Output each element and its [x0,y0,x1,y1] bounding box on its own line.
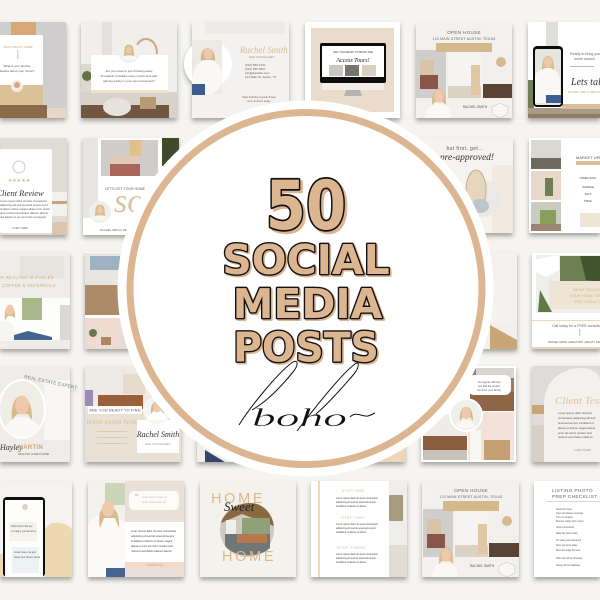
card: listing photo prep checklist: Mow and edge the lawn [556,549,581,552]
card: sold post: RACHEL SMITH | REALTOR [100,228,136,232]
card: client review tablet post: quis nostrud exercitation ullamco laboris [0,211,48,215]
card: real estate expert post: Hayley [0,443,23,452]
card: real estate expert post: REAL ESTATE EXPERT [24,374,78,390]
card: three steps post: STEP TWO [341,515,365,520]
title line: 50: 50 [266,165,346,245]
card: sweet home agent post: Rachel Smith [136,430,179,439]
card: woman quote post [88,481,184,577]
card: client testimonial arch post: nostrud exercitation ullamco [558,435,593,439]
card: pre-approved post: but first, get... [446,146,484,152]
card: sweet home agent post: REAL ESTATE AGENT [145,443,171,446]
title line: posts: POSTS [233,325,379,372]
card: client review tablet post: ★★★★★ [8,178,31,184]
card: home sweet home post: HOME [222,549,276,565]
card: sold post: sold [114,183,172,220]
card: home question post: feature about your home? [0,69,35,73]
card: phone home search post [528,22,600,118]
card: photo collage post [85,252,181,349]
card: three steps post: adipiscing elit sed do eiusmod tempor [336,501,376,504]
card: three steps post: adipiscing elit sed do eiusmod tempor [336,557,376,560]
card: three steps post: incididunt ut labore et dolore [336,505,367,508]
script word: boho [239,361,375,432]
card: open house post [416,23,512,118]
card: agent contact post: Rachel Smith [239,45,288,55]
card: three steps post: Lorem ipsum dolor sit amet consectetur [336,523,378,526]
card: sweet home agent post: home sweet home [87,417,140,426]
card: home value post: FOR TODAY? [574,299,600,304]
card: agent contact post: REAL ESTATE AGENT [249,56,275,59]
card: testimonial under circle [197,366,293,462]
card: bedroom photo post [420,252,517,349]
title line: 50: 50 [266,165,346,245]
card: client testimonial arch post: CLIENT NAME [574,449,591,452]
card: woman quote post: Lorem ipsum dolor sit amet consectetur [131,529,177,533]
title line: social: SOCIAL [222,236,390,284]
card: open house post repeated: RACHEL SMITH [470,564,495,568]
card: phone chat post [0,481,72,577]
card: client testimonial arch post: labore et dolore magna aliqua [558,426,595,430]
card: client review tablet post: ut labore dolore magna aliqua enim minim [0,207,51,211]
title line: posts: POSTS [235,326,380,373]
card: sold post: LET'S GET YOUR HOME [105,187,146,191]
card: woman quote post: incididunt ut labore et dolore magna [131,539,173,543]
card: monitor online tour post: Access Tours! [335,58,370,64]
title line: 50: 50 [268,168,349,248]
card: client testimonial arch post: eiusmod tempor incididunt ut [558,421,594,425]
card: sweet home agent post [85,366,181,462]
card: listing photo prep checklist: Make the beds neatly [556,532,579,535]
card: quote and photo grid post: you find the perfect [478,384,500,388]
card: open house post: 123 MAIN STREET AUSTIN, TEXAS [432,37,496,41]
title line: posts: POSTS [233,325,379,372]
card: home value post: WHAT WOULD [573,287,600,292]
card: listing photo prep checklist: Clear countertops [556,526,575,529]
card: market update post [529,138,600,233]
card: woman quote post: " [135,494,138,501]
card: agent contact post [184,22,289,118]
card: home sweet home post [200,481,296,577]
card: woman quote post: aliqua ut enim ad minim veniam quis [131,544,174,548]
card: home value post [532,253,600,349]
card: client review tablet post: Lorem ipsum dolor sit amet consectetur [0,199,47,203]
card: market update post: PRICE [584,200,592,203]
card: quote and photo grid post: Our agents will help [478,380,501,384]
card: home sweet home post: HOME [211,491,265,507]
card: three steps post [311,481,407,577]
card: open house post: RACHEL SMITH [463,105,488,109]
card: three steps post: STEP ONE [341,488,365,493]
card: agent contact post: let's connect today [247,99,271,103]
title line: social: SOCIAL [222,236,390,284]
card: phone home search post: home search [574,57,595,61]
card: three steps post: STEP THREE [337,545,365,550]
card: open house post repeated: OPEN HOUSE [454,488,488,493]
card: real estate expert post: MARTIN [18,445,43,451]
card: open house post repeated: 123 MAIN STREET AUSTIN, TEXAS [439,495,503,499]
card: listing photo prep checklist: Put away personal items [556,539,582,542]
title line: media: MEDIA [234,282,384,330]
card: sold post [83,138,179,235]
card: home question post: WHAT ABOUT HOME [3,45,33,49]
card: listing photo prep checklist: Remove clutter from rooms [556,520,585,523]
card: agent contact post: info@website.com [245,71,270,75]
card: three steps post: incididunt ut labore et dolore [336,561,367,564]
card: client review tablet post: nisi aliquip ex ea commodo consequat [0,215,46,219]
card: three steps post: Lorem ipsum dolor sit amet consectetur [336,553,378,556]
card: buying a home post: thousands of dollars every month and start [101,74,158,78]
card: listing photo prep checklist: Park cars off the driveway [556,557,583,560]
card: client review tablet post: adipiscing elit sed eiusmod tempor incid [0,203,48,207]
card: listing photo prep checklist: Clean the home [556,508,573,511]
title line: social: SOCIAL [224,238,391,286]
script word: boho: boho [252,404,347,432]
card: agent contact post: Start building a great future [242,95,276,99]
card: home sweet home post: Sweet [224,499,255,514]
card: agent contact post: 123 Main St, Austin, TX [245,75,276,79]
card: quote and photo grid post [421,366,516,462]
card: agent contact post: (512) 555-1234 [245,63,266,67]
title: 50 social media posts [222,165,391,373]
card: open house post: OPEN HOUSE [447,30,481,35]
title line: media: MEDIA [233,280,383,328]
card: market update post: HOMES SOLD [580,177,597,180]
card: home question post [0,22,66,118]
card: real estate expert post: REALTOR | AGENT NAME [18,452,49,456]
card: buying a home post: Are you close to just throwing away [105,69,153,73]
card: woman quote post: adipiscing elit sed do eiusmod tempor [131,534,175,538]
card: home question post: What is your favorite [3,64,31,68]
card: client testimonial arch post [532,366,600,462]
card: three steps post: adipiscing elit sed do eiusmod tempor [336,527,376,530]
card: woman quote post: amet consectetur elit [142,500,166,504]
card: pre-approved post: pre-approved! [439,153,494,163]
card: phone chat post: listed your dream home [14,556,41,559]
card: listing photo prep checklist: Store pet items away [556,544,578,547]
central badge circle [118,100,494,476]
card: listing photo prep checklist: Open all window coverings [556,512,584,515]
card: buying a home post [81,22,177,118]
card: monitor online tour post [305,22,400,118]
card: client testimonial arch post: consectetur adipiscing elit sed [558,416,596,420]
card: market update post: AVERAGE [582,186,594,189]
title line: media: MEDIA [233,280,383,328]
card: market update post: DAYS [585,193,592,196]
card: phone chat post: Great news, we just [14,551,36,554]
card: woman quote post: Lorem ipsum dolor sit [142,495,167,499]
card: client testimonial arch post: enim ad minim veniam quis [558,431,592,435]
card: realtor coffee and referrals post [0,252,70,349]
card: agent contact post: (512) 555-4567 [245,67,266,71]
card: open house post repeated [422,481,519,577]
card: listing photo prep checklist: Turn on all lights [556,516,574,519]
card: quote and photo grid post: home for your family [477,388,501,392]
card: phone chat post: Hello there! We are [11,525,33,528]
card: client review tablet post: CLIENT NAME [12,227,28,230]
card: real estate expert post [0,366,78,462]
card: listing photo prep checklist [534,481,600,577]
card: listing photo prep checklist: LISTING PHOTO [552,488,593,494]
card: buying a home post: gaining equity in your own investment? [103,79,155,83]
card: monitor online tour post: GET YOU READY TO BOOK THE [333,50,373,54]
card: sweet home agent post: ARE YOU READY TO FIND [89,408,141,412]
card: client testimonial arch post: Lorem ipsum dolor sit amet [558,411,592,415]
card: three steps post: incididunt ut labore et dolore [336,531,367,534]
card: three steps post: Lorem ipsum dolor sit amet consectetur [336,497,378,500]
card: pre-approved post [416,138,513,233]
card: tan post under circle [310,366,405,462]
card: woman quote post: nostrud exercitation ullamco laboris [131,549,172,553]
card: client review tablet post [0,138,67,235]
card: woman quote post: CONTACT ME [147,564,163,567]
card: listing photo prep checklist: PREP CHECKLIST [552,494,597,500]
card: phone chat post: so happy you found us [11,530,37,533]
card: listing photo prep checklist: Sweep all the walkways [556,564,581,567]
